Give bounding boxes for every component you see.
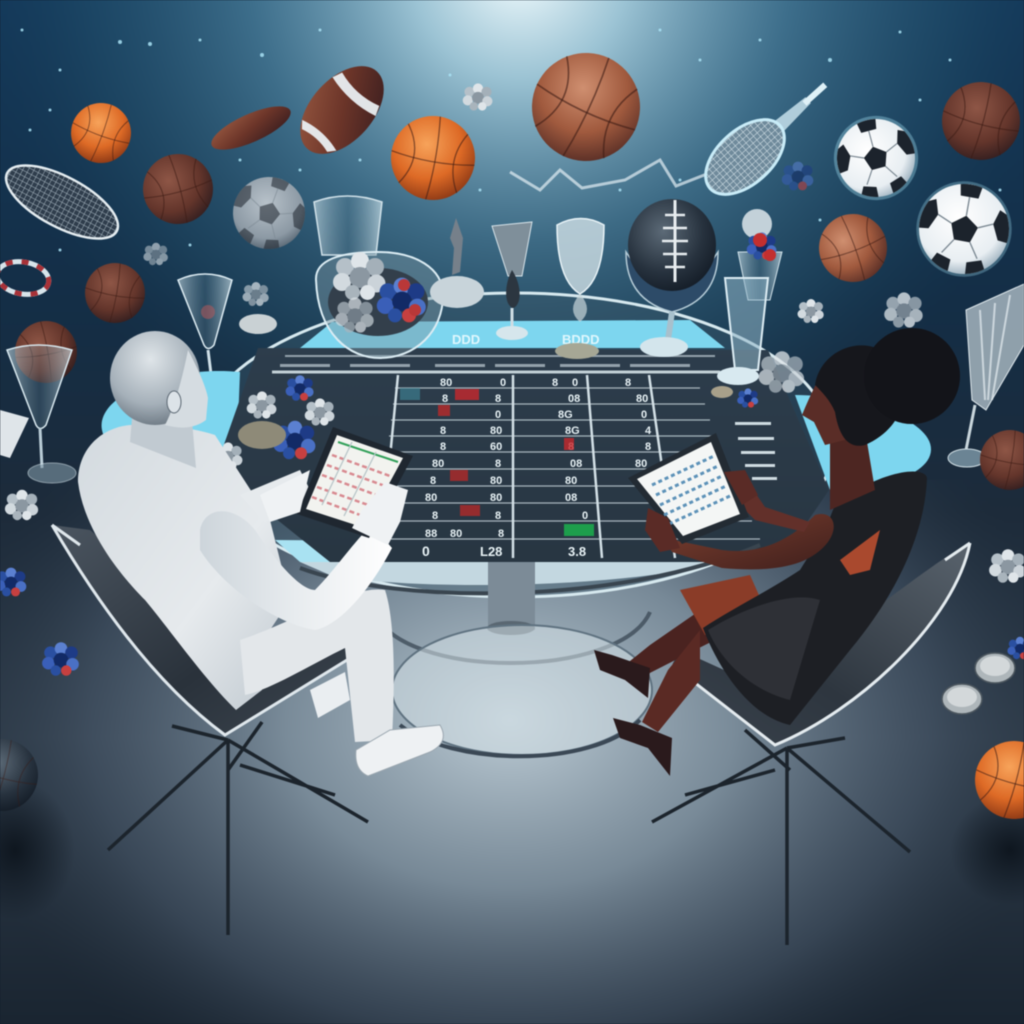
tall water glass [717, 278, 768, 385]
table centre labels [452, 332, 600, 347]
bead bracelet [0, 258, 51, 298]
football: flat brown [206, 98, 296, 158]
screen odds values: 60 [490, 441, 502, 453]
screen grid [272, 372, 760, 560]
screen odds values: 0 [495, 409, 501, 421]
crystal cluster top [463, 83, 492, 111]
side panel lines [735, 422, 777, 480]
screen odds values: 08 [565, 492, 577, 504]
woman legs [625, 600, 725, 678]
screen odds values: 4 [645, 425, 652, 437]
woman heel front [594, 650, 650, 698]
screen odds values: 80 [636, 393, 648, 405]
cyan table top [102, 320, 931, 585]
coins on floor [942, 653, 1015, 714]
screen odds values: 8 [495, 393, 501, 405]
screen odds values: 8 [568, 441, 574, 453]
martini glass: far left [7, 345, 76, 483]
screen odds values: 8 [625, 377, 631, 389]
red and green highlights [400, 388, 594, 536]
screen odds values: 08 [570, 458, 582, 470]
man far arm [240, 470, 315, 522]
woman neck [830, 430, 875, 510]
figurine trophy [430, 218, 484, 308]
basketball: orange centre [384, 109, 482, 207]
chair: woman [652, 543, 970, 945]
screen odds values: 0 [572, 377, 578, 389]
screen odds values: 80 [635, 458, 647, 470]
screen odds values: L28 [480, 544, 502, 559]
goblet with black football [626, 199, 718, 357]
screen odds values: 08 [568, 393, 580, 405]
bead clusters on table [213, 351, 804, 470]
man near arm [200, 511, 392, 630]
person: woman [594, 328, 960, 776]
football: striped [284, 51, 400, 169]
betting odds screen [215, 348, 829, 562]
sparkle particles [20, 28, 1002, 252]
basketball: lower left [0, 731, 46, 819]
chair: man [52, 525, 368, 935]
martini glass: left of table [178, 274, 232, 389]
screen odds values: 3.8 [568, 544, 586, 559]
screen odds values: 80 [425, 492, 437, 504]
basketball: dark behind glass [10, 316, 82, 388]
flower in glass [738, 209, 782, 300]
man thigh and shin [240, 590, 394, 742]
tall flute right [948, 284, 1024, 467]
table glass rim [197, 293, 833, 597]
screen odds values: 8G [558, 409, 573, 421]
man ear [167, 391, 181, 413]
basketball: brown upper left [135, 146, 221, 232]
table pedestal and base [300, 545, 760, 756]
woman hair [815, 345, 904, 446]
woman hair bun [864, 328, 960, 424]
woman heel rear [613, 718, 672, 776]
glass tumbler behind bowl [314, 196, 382, 255]
soccer ball: right [909, 174, 1019, 284]
screen odds values: 8 [440, 425, 446, 437]
basketball: bright orange upper left [63, 95, 139, 171]
man back foot [310, 672, 350, 718]
man hands [260, 470, 408, 545]
person: man in white [78, 331, 443, 776]
screen odds values [422, 377, 652, 559]
screen odds values: 0 [582, 510, 588, 522]
screen odds values: 80 [490, 492, 502, 504]
man face [165, 350, 208, 428]
tennis racket: left [0, 151, 128, 253]
screen odds values: 80 [490, 425, 502, 437]
woman arm [664, 514, 834, 569]
man head [110, 331, 200, 425]
basketball: behind flute right [975, 425, 1024, 495]
screen odds values: 80 [490, 475, 502, 487]
woman back skin [840, 530, 880, 575]
screen odds values: 8 [442, 393, 448, 405]
screen odds values: 8 [498, 528, 504, 540]
screen odds values: 88 [425, 528, 437, 540]
man shoe [356, 725, 443, 776]
screen odds values: 0 [422, 543, 430, 559]
tennis racket: right [692, 65, 843, 209]
table centre labels: BDDD [562, 332, 600, 347]
screen odds values: 0 [641, 409, 647, 421]
woman upper hand arm [725, 475, 810, 532]
woman dress skirt highlight [708, 597, 820, 700]
screen odds values: 80 [432, 458, 444, 470]
woman face [802, 380, 845, 445]
tablet: man [297, 427, 413, 538]
tablet: woman [628, 433, 749, 544]
screen odds values: 80 [440, 377, 452, 389]
screen odds values: 8 [432, 510, 438, 522]
glass bowl with crystals [316, 252, 443, 358]
crystal clusters on wall [0, 162, 1024, 676]
soccer ball: grey left [221, 166, 317, 261]
coin on table centre [555, 343, 599, 359]
screen odds values: 8 [552, 377, 558, 389]
goblet trophy [492, 222, 532, 340]
screen odds values: 80 [565, 475, 577, 487]
coin near glass [239, 314, 277, 334]
screen odds values: 8 [430, 475, 436, 487]
table centre labels: DDD [452, 332, 480, 347]
soccer ball: upper right [824, 106, 928, 210]
screen odds values: 8G [565, 425, 580, 437]
screen odds values: 8 [495, 510, 501, 522]
screen odds values: 8 [645, 441, 651, 453]
trend line [510, 160, 712, 190]
screen odds values: 8 [440, 441, 446, 453]
screen odds values: 8 [495, 458, 501, 470]
flute with white crystals [557, 218, 604, 322]
paper sheet [0, 410, 29, 458]
woman thigh skin [680, 575, 770, 635]
screen odds values: 80 [450, 528, 462, 540]
man torso [78, 425, 290, 710]
basketball: lower right [966, 732, 1024, 828]
screen odds values: 0 [500, 377, 506, 389]
basketball: far upper right [933, 73, 1024, 169]
woman dress [703, 471, 927, 725]
basketball: right mid [809, 204, 897, 292]
basketball: large top [514, 35, 658, 179]
man neck [130, 418, 196, 468]
screen header [280, 355, 715, 367]
woman hands [645, 470, 758, 552]
basketball: dark left [80, 258, 150, 328]
